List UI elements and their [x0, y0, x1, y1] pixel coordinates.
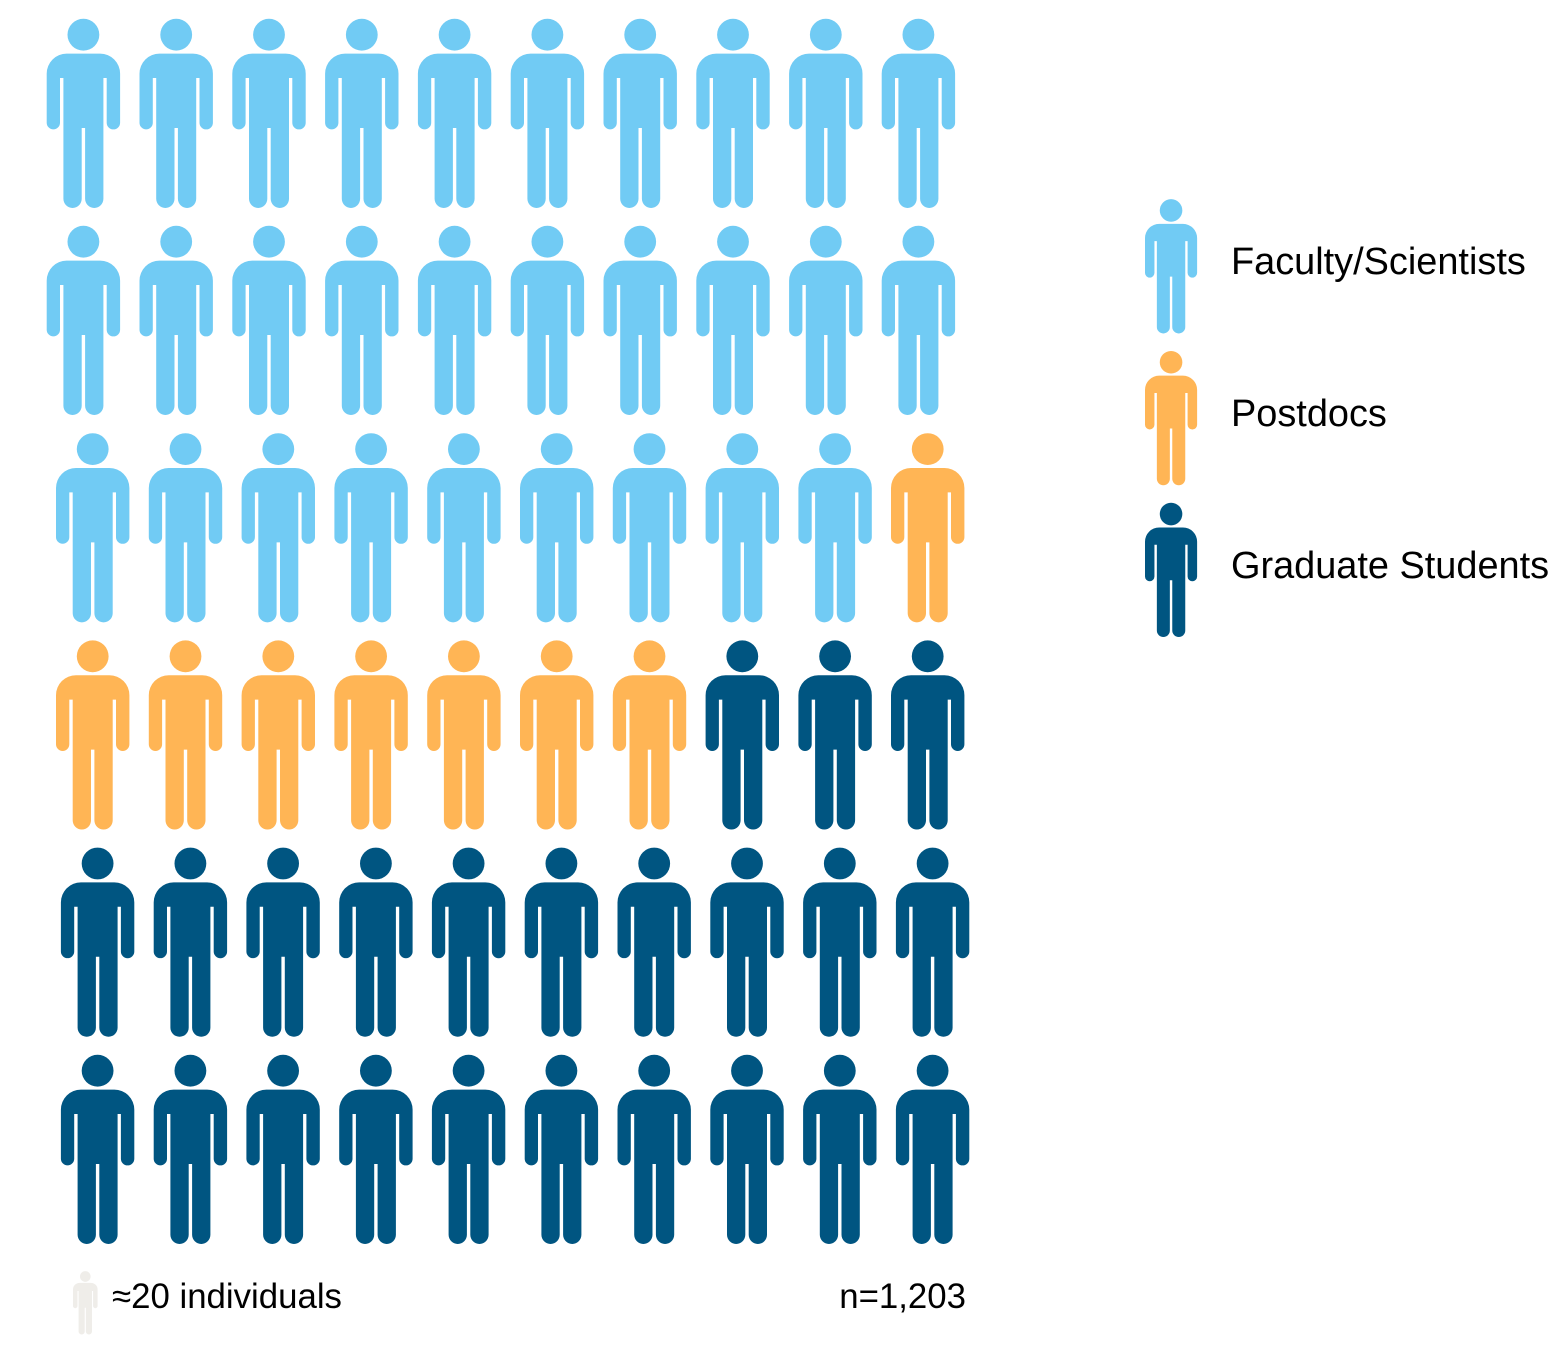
pictogram grid	[47, 19, 969, 1244]
legend label: faculty/scientists: Faculty/Scientists	[1231, 241, 1526, 283]
row 3: nine faculty/scientists and one postdoc	[56, 433, 964, 622]
row 2: faculty/scientists	[47, 226, 955, 415]
legend icon: postdocs	[1145, 351, 1197, 485]
legend label: postdocs: Postdocs	[1231, 393, 1387, 435]
row 6: graduate students	[61, 1055, 969, 1244]
row 5: graduate students	[61, 848, 969, 1037]
legend icon: graduate students	[1145, 503, 1197, 637]
icon: key figure	[73, 1271, 98, 1335]
sample size: n=1,203	[839, 1277, 966, 1316]
legend	[1145, 199, 1549, 637]
row 1: faculty/scientists	[47, 19, 955, 208]
legend icon: faculty/scientists	[1145, 199, 1197, 333]
row 4: seven postdocs and three graduate students	[56, 640, 964, 830]
scale note: ≈20 individuals	[112, 1277, 342, 1316]
legend label: graduate students: Graduate Students	[1231, 545, 1549, 587]
